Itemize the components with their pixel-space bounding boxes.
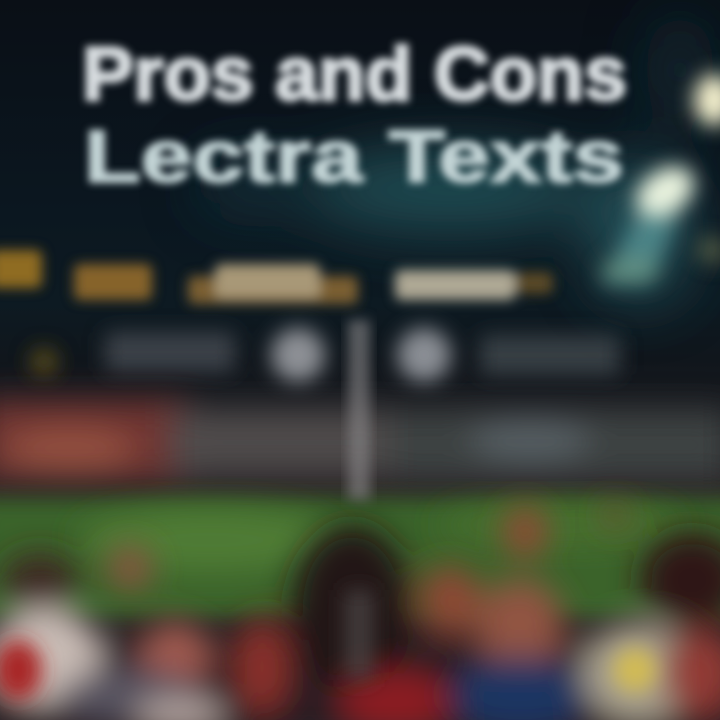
title: blurred heading (82, 32, 627, 198)
grey banner row with round emblems (30, 328, 620, 382)
floodlights (598, 74, 720, 285)
pitch (0, 498, 720, 618)
foreground fans (0, 503, 720, 720)
fan details (0, 590, 657, 700)
orange score banner band (0, 250, 553, 304)
blurred crowd stands (0, 400, 720, 480)
title: blurred heading: Lectra Texts (84, 115, 624, 198)
central goal post (348, 320, 370, 500)
teal floodlight glow (200, 10, 715, 300)
title: blurred heading: Pros and Cons (82, 32, 627, 117)
